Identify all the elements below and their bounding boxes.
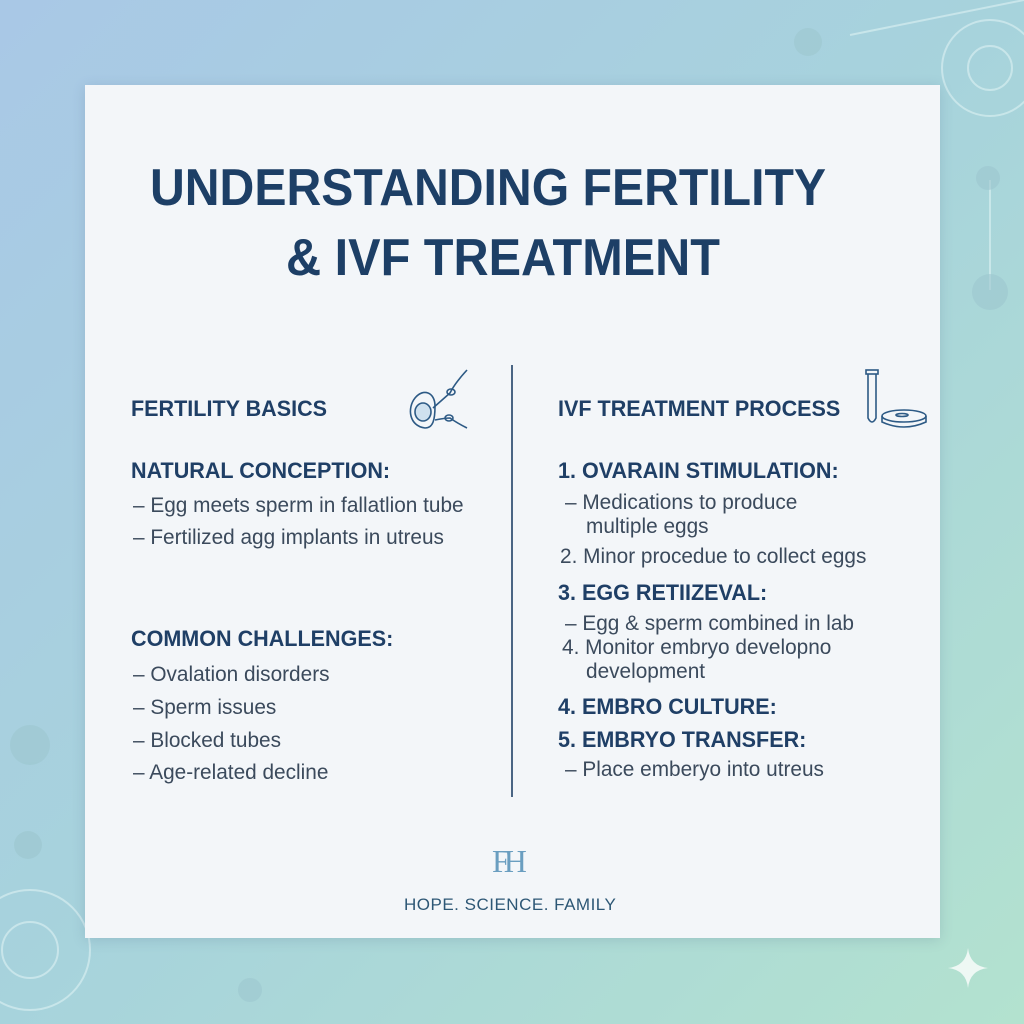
text: – Ovalation disorders [133, 663, 330, 686]
section: common challenges: COMMON CHALLENGES: [131, 626, 393, 651]
text: – Medications to produce [565, 491, 797, 514]
card panel [85, 85, 940, 938]
title [150, 159, 826, 287]
section: natural conception: NATURAL CONCEPTION: [131, 458, 390, 483]
text: 4. EMBRO CULTURE: [558, 694, 777, 719]
text: development [586, 660, 705, 683]
text: multiple eggs [586, 515, 709, 538]
icon: egg and sperm [410, 370, 468, 429]
tagline: HOPE. SCIENCE. FAMILY [404, 895, 616, 914]
text: 4. Monitor embryo developno [562, 636, 831, 659]
logo: FH [492, 843, 521, 879]
text: – Fertilized agg implants in utreus [133, 526, 444, 549]
text: – Age-related decline [133, 761, 328, 784]
title: UNDERSTANDING FERTILITY [150, 159, 826, 217]
title: & IVF TREATMENT [286, 229, 720, 287]
text: 5. EMBRYO TRANSFER: [558, 727, 806, 752]
text: 3. EGG RETIIZEVAL: [558, 580, 767, 605]
heading: IVF treatment process: IVF TREATMENT PROCESS [558, 396, 840, 421]
text: – Blocked tubes [133, 729, 281, 752]
text: – Sperm issues [133, 696, 276, 719]
text: – Egg & sperm combined in lab [565, 612, 854, 635]
icon: test tube and petri dish [865, 369, 927, 428]
text: 2. Minor procedue to collect eggs [560, 545, 866, 568]
IVF steps: 1. OVARAIN STIMULATION: [558, 458, 839, 483]
heading: fertility basics: FERTILITY BASICS [131, 396, 327, 421]
text: – Place emberyo into utreus [565, 758, 824, 781]
text: – Egg meets sperm in fallatlion tube [133, 494, 464, 517]
divider [511, 365, 513, 797]
